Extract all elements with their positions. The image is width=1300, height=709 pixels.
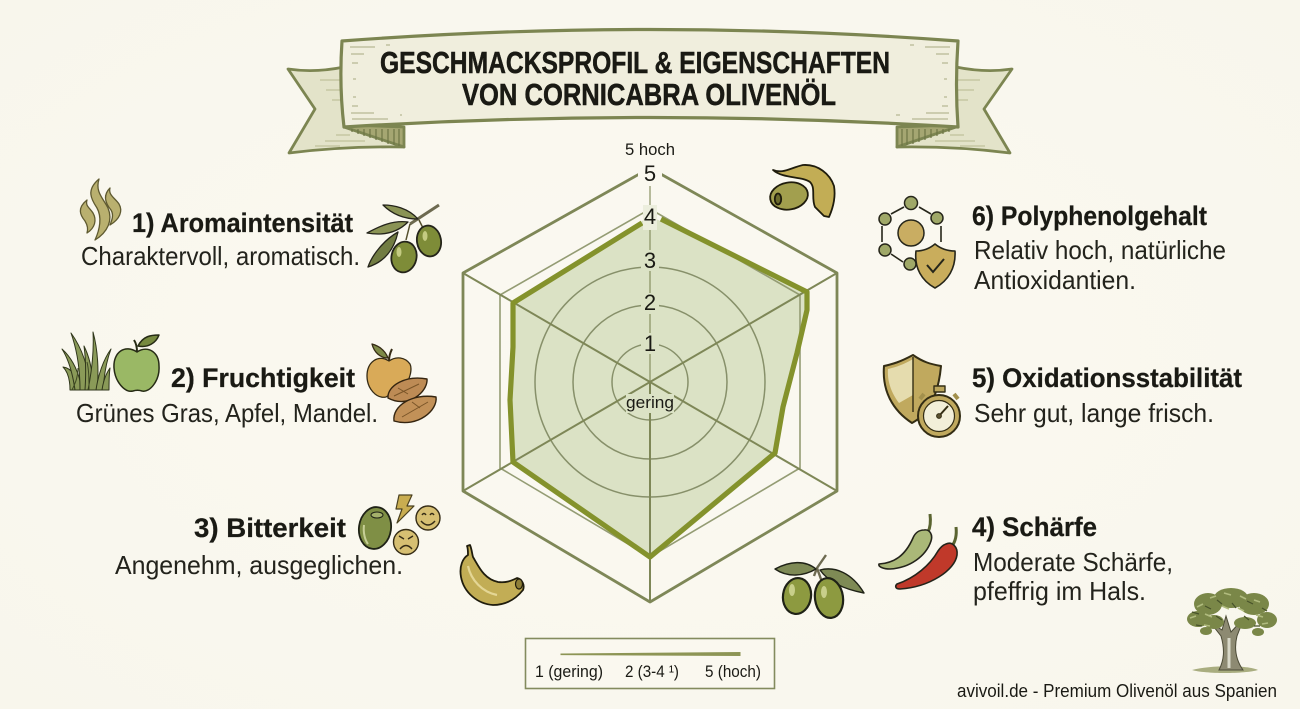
scale numbers: 1	[644, 331, 656, 356]
item 4: Schärfe	[879, 512, 1173, 606]
item 5: Oxidationsstabilität	[884, 355, 1242, 437]
description: Moderate Schärfe,	[973, 547, 1173, 577]
heading: 4) Schärfe	[972, 512, 1097, 542]
banner right tail	[897, 67, 1012, 153]
icon: smiling face	[416, 506, 440, 530]
label: gering: gering	[626, 393, 674, 412]
legend	[526, 638, 774, 688]
scale numbers: 2	[644, 290, 656, 315]
scale numbers: 3	[644, 248, 656, 273]
label: 5 hoch: 5 hoch	[625, 140, 675, 159]
description: Sehr gut, lange frisch.	[974, 398, 1214, 428]
icon: chili peppers	[879, 514, 957, 589]
icon: olive branch	[367, 205, 444, 275]
description: Angenehm, ausgeglichen.	[115, 550, 403, 580]
footer credit: avivoil.de - Premium Olivenöl aus Spanien	[957, 681, 1277, 701]
outer hexagon	[463, 168, 837, 602]
legend labels: 5 (hoch)	[705, 663, 761, 681]
title text: GESCHMACKSPROFIL & EIGENSCHAFTEN	[380, 45, 890, 80]
icon: olive tree	[1187, 588, 1277, 673]
level 4 hexagon	[500, 209, 800, 557]
icon: shield and stopwatch	[884, 355, 960, 437]
scale numbers: 4	[644, 204, 656, 229]
item 2: Fruchtigkeit	[62, 332, 436, 428]
legend labels: 2 (3-4 ¹)	[625, 663, 679, 681]
icon: green apple	[114, 335, 159, 391]
legend gradient line	[561, 652, 740, 656]
heading: 3) Bitterkeit	[194, 513, 346, 543]
rings	[535, 267, 765, 497]
spokes	[463, 168, 837, 602]
banner left tail	[288, 67, 404, 153]
title banner	[288, 30, 1012, 153]
icon: lightning bolt	[396, 495, 414, 523]
data area fill	[510, 216, 807, 557]
heading: 2) Fruchtigkeit	[171, 363, 355, 393]
icon: orange apple	[367, 344, 411, 397]
description: pfeffrig im Hals.	[973, 576, 1146, 606]
title text: VON CORNICABRA OLIVENÖL	[462, 77, 836, 112]
icon: aroma wisps	[80, 179, 121, 240]
description: Charaktervoll, aromatisch.	[81, 241, 360, 271]
decorative olive branch bottom	[775, 555, 864, 620]
heading: 5) Oxidationsstabilität	[972, 363, 1242, 393]
icon: polyphenol molecule with shield	[879, 196, 955, 288]
scale numbers	[638, 160, 662, 356]
radar chart	[463, 140, 837, 602]
description: Grünes Gras, Apfel, Mandel.	[76, 398, 378, 428]
item 6: Polyphenolgehalt	[879, 196, 1226, 295]
heading: 1) Aromaintensität	[132, 208, 353, 238]
item 3: Bitterkeit	[115, 495, 440, 580]
heading: 6) Polyphenolgehalt	[972, 201, 1207, 231]
icon: frowning face	[394, 530, 418, 554]
legend labels: 1 (gering)	[535, 663, 603, 681]
icon: grass	[62, 332, 111, 390]
banner main ribbon	[341, 30, 958, 127]
description	[974, 235, 1226, 295]
data outline	[510, 219, 807, 557]
icon: bitter olive	[356, 505, 394, 551]
legend labels	[535, 663, 761, 681]
decorative pepper bottom left	[460, 545, 524, 605]
scale numbers: 5	[644, 161, 656, 186]
banner hatch marks	[350, 45, 950, 119]
item 1: Aromaintensität	[80, 179, 444, 275]
decorative olive and pepper top right	[768, 165, 835, 217]
description: Antioxidantien.	[974, 265, 1136, 295]
title text	[380, 45, 890, 112]
description: Relativ hoch, natürliche	[974, 235, 1226, 265]
icon: almonds	[388, 378, 436, 423]
description	[973, 547, 1173, 606]
